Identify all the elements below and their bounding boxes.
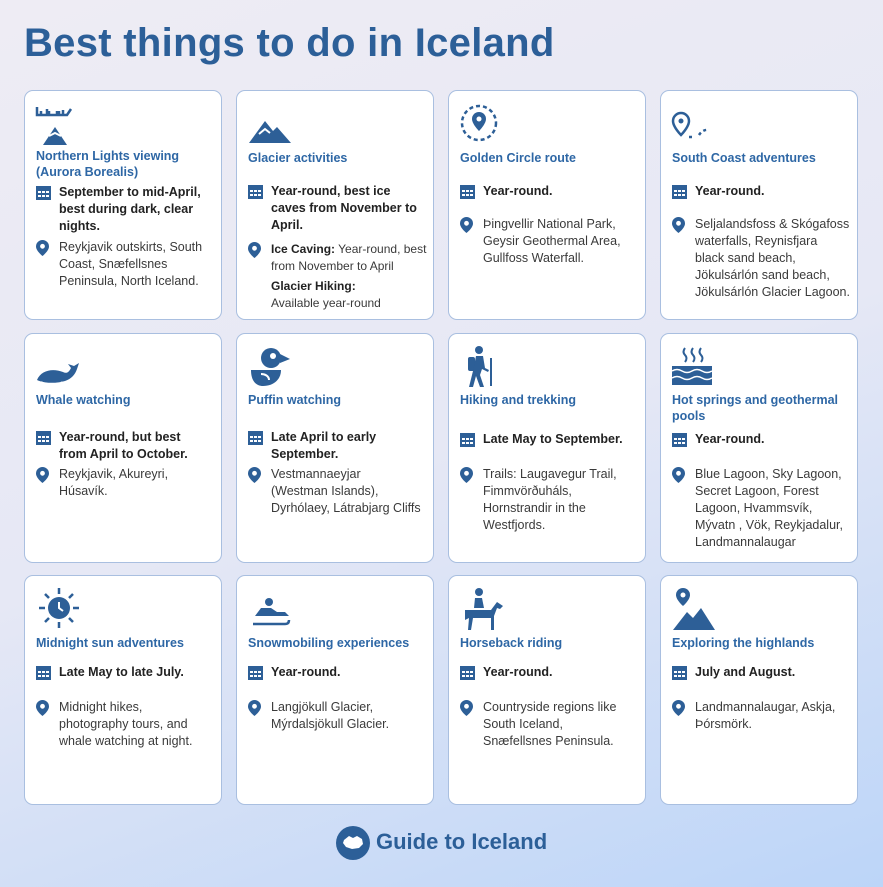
title: Best things to do in Iceland — [24, 21, 555, 65]
panel: midnight sun: whale watching at night. — [59, 734, 192, 748]
heading: Snowmobiling experiences — [248, 636, 409, 650]
panel: hot springs: Blue Lagoon, Sky Lagoon, — [695, 467, 842, 481]
icon: snowmobile — [253, 598, 290, 626]
panel: midnight sun — [24, 575, 222, 805]
panel: whale: from April to October. — [59, 447, 188, 461]
panel: puffin: Late April to early — [271, 430, 376, 444]
icon: pin mountain — [673, 588, 715, 630]
panel: horseback: South Iceland, — [483, 717, 563, 731]
panel: northern lights: Coast, Snæfellsnes — [59, 257, 167, 271]
panel: midnight sun: photography tours, and — [59, 717, 188, 731]
when — [248, 184, 417, 232]
heading: Exploring the highlands — [672, 636, 814, 650]
when — [460, 432, 623, 447]
where — [36, 700, 192, 748]
where — [248, 700, 389, 731]
icon: puffin — [251, 348, 290, 386]
where — [460, 217, 621, 265]
panel: hot springs: Lagoon, Hvammsvík, — [695, 501, 812, 515]
panel: south coast — [660, 90, 858, 320]
icon: pin path — [672, 112, 706, 138]
icon: hot spring — [672, 347, 712, 385]
when — [36, 430, 188, 461]
panel: highlands: Landmannalaugar, Askja, — [695, 700, 835, 714]
footer logo — [336, 826, 547, 860]
panel: snowmobiling — [236, 575, 434, 805]
panel: south coast: Jökulsárlón sand beach, — [695, 268, 830, 282]
panel: glacier: Available year-round — [271, 296, 381, 310]
heading: Northern Lights viewing — [36, 149, 179, 163]
panel: glacier: Year-round, best ice — [271, 184, 390, 198]
panel: hot springs: Secret Lagoon, Forest — [695, 484, 819, 498]
panel: golden circle: Year-round. — [483, 184, 552, 198]
where — [672, 217, 850, 299]
heading — [36, 149, 179, 179]
where — [672, 467, 843, 549]
heading: Hot springs and geothermal — [672, 393, 838, 407]
panel: snowmobiling: Langjökull Glacier, — [271, 700, 373, 714]
panel: glacier: caves from November to — [271, 201, 417, 215]
panel: northern lights: Peninsula, North Iceland. — [59, 274, 199, 288]
icon: sun clock — [39, 588, 79, 628]
panel: glacier: Glacier Hiking: — [271, 279, 356, 293]
panel: snowmobiling: Mýrdalsjökull Glacier. — [271, 717, 389, 731]
when — [672, 432, 764, 447]
panel: northern lights: best during dark, clear — [59, 202, 193, 216]
panel: highlands — [660, 575, 858, 805]
icon: whale — [37, 363, 79, 383]
panel: hiking: Westfjords. — [483, 518, 545, 532]
icon: hiker — [468, 346, 492, 387]
panel: whale — [24, 333, 222, 563]
panel: snowmobiling: Year-round. — [271, 665, 340, 679]
panel: hiking: Hornstrandir in the — [483, 501, 586, 515]
heading: Horseback riding — [460, 636, 562, 650]
when — [248, 430, 376, 461]
panel: whale: Húsavík. — [59, 484, 108, 498]
panel: puffin: September. — [271, 447, 338, 461]
when — [248, 665, 340, 680]
panel: puffin: (Westman Islands), — [271, 484, 378, 498]
panel: hot springs — [660, 333, 858, 563]
when — [36, 665, 184, 680]
panel: glacier: April. — [271, 218, 303, 232]
panel: south coast: waterfalls, Reynisfjara — [695, 234, 817, 248]
heading: South Coast adventures — [672, 151, 816, 165]
panel: northern lights: September to mid-April, — [59, 185, 201, 199]
when — [672, 665, 795, 680]
panel: glacier — [236, 90, 434, 320]
where — [672, 700, 835, 731]
panel: midnight sun: Late May to late July. — [59, 665, 184, 679]
panel: hiking: Late May to September. — [483, 432, 623, 446]
panel: south coast: Seljalandsfoss & Skógafoss — [695, 217, 849, 231]
panel: highlands: July and August. — [695, 665, 795, 679]
panel: midnight sun: Midnight hikes, — [59, 700, 142, 714]
panel: horseback — [448, 575, 646, 805]
panel: northern lights: nights. — [59, 219, 100, 233]
where — [460, 700, 616, 748]
panel: puffin — [236, 333, 434, 563]
panel: south coast: black sand beach, — [695, 251, 796, 265]
panel: whale: Reykjavik, Akureyri, — [59, 467, 168, 481]
panel: south coast: Jökulsárlón Glacier Lagoon. — [695, 285, 850, 299]
heading: Hiking and trekking — [460, 393, 576, 407]
icon: horse rider — [465, 588, 503, 630]
panel: horseback: Countryside regions like — [483, 700, 616, 714]
heading: pools — [672, 409, 705, 423]
panel: glacier: from November to April — [271, 259, 394, 273]
where — [36, 240, 202, 288]
panel: whale: Year-round, but best — [59, 430, 181, 444]
heading — [672, 393, 838, 423]
icon: mountain — [249, 121, 291, 143]
panel: horseback: Snæfellsnes Peninsula. — [483, 734, 614, 748]
panel: golden circle: Geysir Geothermal Area, — [483, 234, 621, 248]
when — [460, 184, 552, 199]
where — [460, 467, 617, 532]
panel: hot springs: Mývatn , Vök, Reykjadalur, — [695, 518, 843, 532]
panel: glacier: Ice Caving: Year-round, best — [271, 242, 426, 256]
heading: Golden Circle route — [460, 151, 576, 165]
panel: hiking — [448, 333, 646, 563]
when — [36, 185, 201, 233]
icon: route pin circle — [460, 104, 498, 142]
where — [248, 467, 421, 515]
heading: Midnight sun adventures — [36, 636, 184, 650]
panel: golden circle: Gullfoss Waterfall. — [483, 251, 584, 265]
brand text: Guide to Iceland — [376, 829, 547, 854]
heading: (Aurora Borealis) — [36, 165, 138, 179]
where — [36, 467, 168, 498]
heading: Whale watching — [36, 393, 130, 407]
panel: hot springs: Landmannalaugar — [695, 535, 796, 549]
panel: northern lights: Reykjavik outskirts, South — [59, 240, 202, 254]
panel: golden circle: Þingvellir National Park, — [483, 217, 616, 231]
panel: hiking: Fimmvörðuháls, — [483, 484, 572, 498]
panel: south coast: Year-round. — [695, 184, 764, 198]
icon: reindeer mountain — [36, 107, 72, 145]
where — [248, 242, 426, 310]
panel: hiking: Trails: Laugavegur Trail, — [483, 467, 617, 481]
panel: golden circle — [448, 90, 646, 320]
panel: puffin: Vestmannaeyjar — [271, 467, 361, 481]
panel: hot springs: Year-round. — [695, 432, 764, 446]
panel: horseback: Year-round. — [483, 665, 552, 679]
panel: puffin: Dyrhólaey, Látrabjarg Cliffs — [271, 501, 421, 515]
heading: Glacier activities — [248, 151, 347, 165]
heading: Puffin watching — [248, 393, 341, 407]
panel: highlands: Þórsmörk. — [695, 717, 752, 731]
when — [460, 665, 552, 680]
icon: logo circle — [336, 826, 370, 860]
panel: northern lights — [24, 90, 222, 320]
when — [672, 184, 764, 199]
